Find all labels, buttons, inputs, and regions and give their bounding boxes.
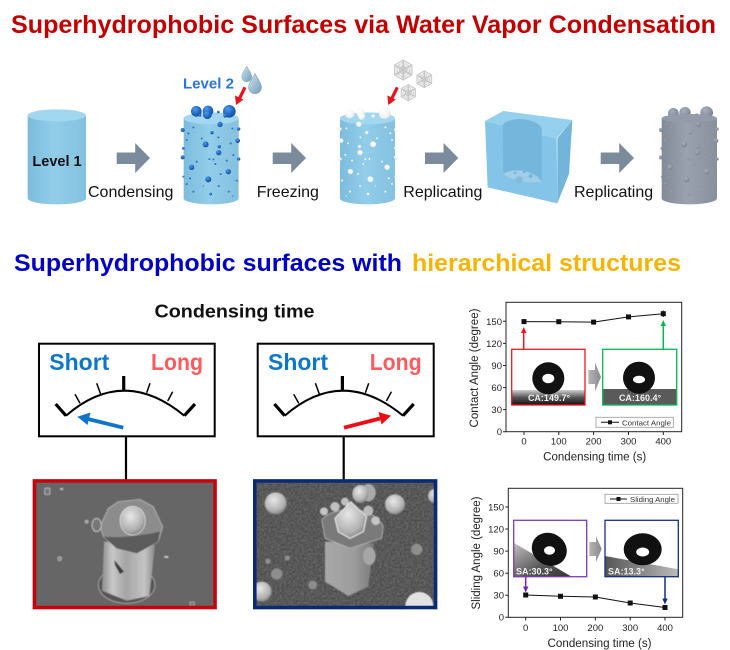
legend [605, 494, 678, 504]
y tick labels: 0 [499, 612, 504, 624]
gauge labels: short: Short [49, 349, 110, 375]
panel: process flow [28, 60, 719, 204]
label: freezing: Freezing [257, 184, 319, 201]
gauge box: long [258, 344, 434, 436]
icon: cut-away mold [485, 111, 572, 203]
data line [523, 592, 668, 610]
icon: snowflakes [395, 60, 432, 101]
icon: water drops [242, 66, 261, 94]
arrow: gray inset transition [588, 362, 601, 392]
y tick labels [486, 317, 502, 438]
arrow: green to last point [660, 320, 666, 350]
x tick labels: 300 [621, 436, 636, 448]
arrow: red to level 2 [235, 87, 245, 105]
inset: CA 160.4: CA:160.4° [619, 393, 661, 403]
plot frame and ticks [505, 488, 683, 620]
y tick labels: 150 [488, 502, 504, 514]
x axis title: Condensing time (s) [548, 638, 652, 650]
x tick labels: 400 [657, 623, 673, 634]
plot frame and ticks [503, 302, 682, 435]
arrow: purple to first point [523, 577, 528, 592]
x tick labels: 0 [521, 436, 527, 448]
arrow: replicating 1 [425, 143, 458, 173]
SEM image: short condensing [32, 479, 217, 610]
gauge box: short [39, 344, 215, 436]
y tick labels: 150 [486, 317, 502, 328]
y tick labels: 90 [491, 361, 502, 372]
subtitle [14, 250, 681, 277]
arrow: red to first point [521, 327, 526, 350]
inset: CA 160.4 [603, 349, 677, 405]
title: Superhydrophobic Surfaces via Water Vapor Condensation [11, 11, 716, 39]
label: replicating 1: Replicating [403, 184, 482, 201]
inset: SA 30.3: SA:30.3° [516, 566, 553, 576]
panel: short time gauge [39, 344, 215, 480]
x tick labels [523, 623, 673, 634]
x axis title: Condensing time (s) [543, 452, 646, 464]
label: level 2: Level 2 [183, 76, 234, 93]
data line [522, 310, 666, 325]
arrow: red to frozen droplets [387, 87, 397, 105]
inset: SA 13.3 [605, 520, 678, 577]
cylinder: final replica [659, 106, 719, 204]
gauge labels: short: Long [151, 349, 203, 375]
x tick labels: 400 [655, 436, 671, 448]
needle: red [344, 412, 391, 428]
arrow: replicating 2 [601, 143, 634, 173]
gauge scale: long [274, 376, 414, 416]
arrow: freezing [273, 143, 306, 173]
label: replicating 2: Replicating [574, 184, 653, 201]
x tick labels: 200 [587, 623, 603, 634]
legend [596, 417, 673, 427]
heading: condensing time: Condensing time [154, 301, 314, 322]
label: condensing: Condensing [88, 184, 173, 201]
y axis title: Sliding Angle (degree) [471, 496, 483, 610]
legend: Contact Angle [622, 418, 671, 427]
gauge scale: short [56, 376, 195, 416]
x tick labels [521, 436, 671, 448]
x tick labels: 200 [586, 436, 602, 448]
y tick labels: 120 [486, 339, 502, 350]
y tick labels: 60 [493, 568, 504, 580]
arrow: navy to last point [662, 577, 668, 604]
legend: Sliding Angle [630, 495, 675, 504]
y tick labels: 90 [493, 546, 504, 558]
needle: blue [77, 412, 123, 428]
y tick labels: 60 [491, 383, 502, 394]
y tick labels: 30 [491, 405, 502, 416]
chart: contact angle [469, 302, 682, 464]
cylinder: frozen droplets [338, 107, 398, 204]
connector: short [125, 436, 127, 480]
cylinder: level 2 with blue droplets [181, 105, 240, 204]
SEM image: long condensing [252, 479, 443, 620]
connector: long [343, 436, 345, 480]
cylinder: level 1: Level 1 [32, 154, 82, 170]
inset: CA 149.7: CA:149.7° [528, 393, 570, 403]
arrow: gray inset transition [589, 536, 602, 562]
inset: SA 13.3: SA:13.3° [608, 566, 645, 576]
inset: SA 30.3 [514, 520, 587, 577]
gauge labels: short [49, 349, 203, 375]
y tick labels: 0 [497, 427, 502, 438]
subtitle: Superhydrophobic surfaces with [14, 250, 402, 277]
y tick labels: 120 [488, 524, 504, 536]
inset: CA 149.7 [512, 349, 585, 405]
y axis title: Contact Angle (degree) [469, 308, 481, 427]
cylinder: level 1 [28, 109, 86, 204]
gauge labels: long: Long [370, 349, 422, 375]
x tick labels: 0 [523, 623, 528, 634]
chart: sliding angle [471, 488, 683, 650]
x tick labels: 300 [622, 623, 638, 634]
panel: long time gauge [258, 344, 434, 480]
gauge labels: long [268, 349, 422, 375]
y tick labels [488, 502, 504, 624]
x tick labels: 100 [551, 436, 567, 448]
arrow: condensing [117, 143, 150, 173]
y tick labels: 30 [493, 590, 504, 602]
subtitle: hierarchical structures [412, 250, 681, 277]
x tick labels: 100 [553, 623, 568, 634]
gauge labels: long: Short [268, 349, 328, 375]
